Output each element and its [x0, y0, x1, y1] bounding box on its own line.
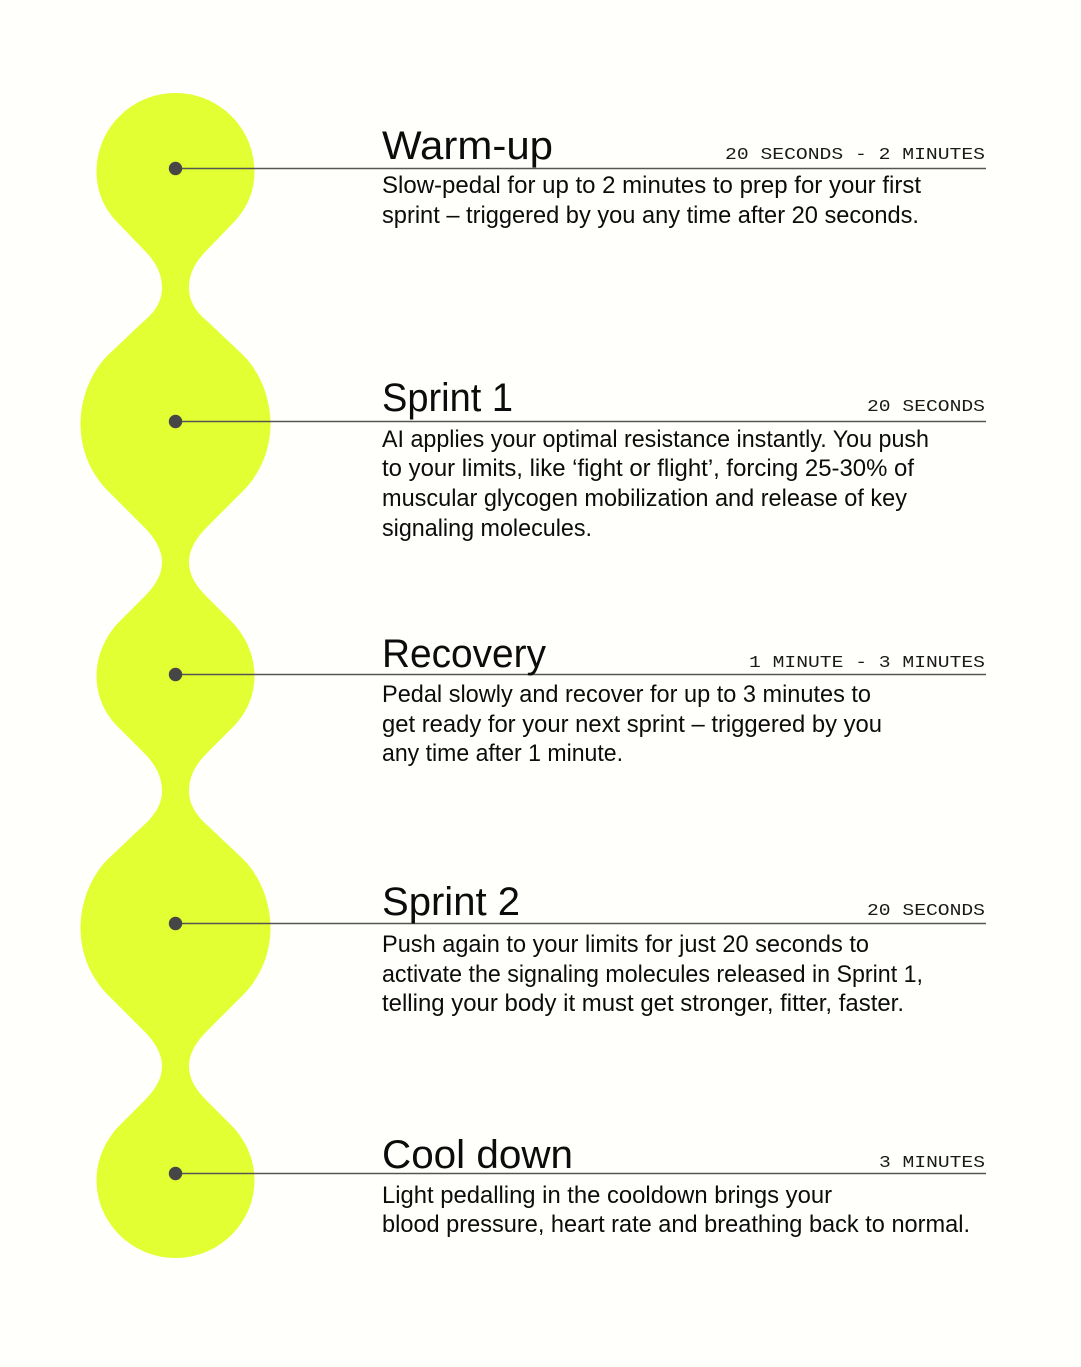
description: any time after 1 minute. — [382, 740, 623, 767]
step: Sprint 1 — [169, 376, 986, 542]
marker dot — [169, 1167, 182, 1180]
duration: 3 MINUTES — [879, 1154, 985, 1173]
description — [382, 172, 921, 229]
leader line — [175, 420, 986, 422]
duration: 20 SECONDS — [867, 398, 985, 417]
duration: 20 SECONDS - 2 MINUTES — [725, 146, 985, 165]
marker dot — [169, 162, 182, 175]
description: activate the signaling molecules released in Sprint 1, — [382, 961, 923, 988]
heading: Recovery — [382, 632, 546, 676]
description: Light pedalling in the cooldown brings your — [382, 1182, 832, 1209]
duration: 1 MINUTE - 3 MINUTES — [749, 654, 985, 673]
description: telling your body it must get stronger, fitter, faster. — [382, 990, 904, 1017]
description: signaling molecules. — [382, 515, 592, 542]
heading: Cool down — [382, 1133, 573, 1177]
description — [382, 1182, 970, 1238]
marker dot — [169, 668, 182, 681]
description: Slow-pedal for up to 2 minutes to prep for your first — [382, 172, 921, 199]
leader line — [175, 922, 986, 924]
description: to your limits, like ‘fight or flight’, forcing 25-30% of — [382, 455, 914, 482]
description: sprint – triggered by you any time after 20 seconds. — [382, 202, 919, 229]
step: Sprint 2 — [169, 880, 986, 1017]
description: Push again to your limits for just 20 seconds to — [382, 931, 869, 958]
leader line — [175, 168, 986, 170]
description: Pedal slowly and recover for up to 3 minutes to — [382, 681, 871, 708]
description: blood pressure, heart rate and breathing back to normal. — [382, 1211, 970, 1238]
marker dot — [169, 415, 182, 428]
description: AI applies your optimal resistance instantly. You push — [382, 426, 929, 453]
description — [382, 681, 882, 767]
heading: Sprint 2 — [382, 880, 520, 924]
step: Recovery — [169, 632, 986, 767]
description: muscular glycogen mobilization and release of key — [382, 485, 907, 512]
step: Cool down — [169, 1133, 986, 1238]
yellow blob chain — [80, 93, 270, 1258]
description — [382, 931, 923, 1017]
heading: Warm-up — [382, 124, 553, 168]
leader line — [175, 674, 986, 676]
duration: 20 SECONDS — [867, 902, 985, 921]
description — [382, 426, 929, 542]
marker dot — [169, 917, 182, 930]
leader line — [175, 1172, 986, 1174]
step: Warm-up — [169, 124, 986, 229]
description: get ready for your next sprint – triggered by you — [382, 711, 882, 738]
heading: Sprint 1 — [382, 376, 513, 420]
